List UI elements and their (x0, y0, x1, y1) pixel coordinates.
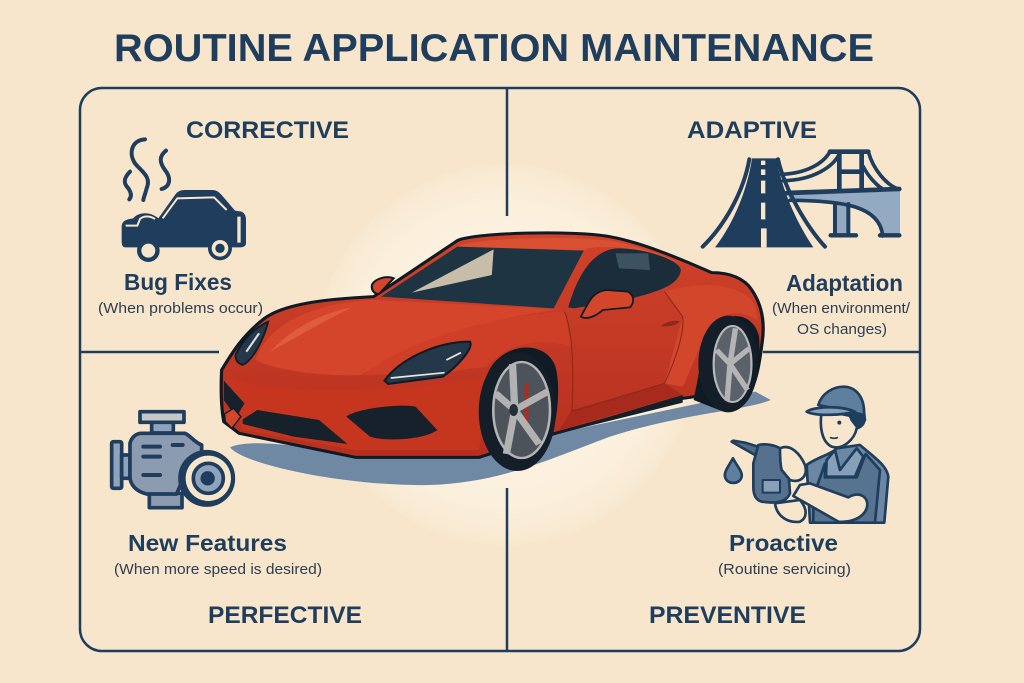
windshield (381, 247, 584, 308)
air intake (346, 406, 437, 439)
icon: smoking car (122, 139, 246, 262)
roof highlight (457, 238, 683, 265)
illustration: red sports car (221, 233, 771, 485)
rear fender highlight (665, 285, 757, 387)
side window (568, 248, 681, 308)
right headlight (385, 342, 471, 384)
label: proactive: Proactive (729, 530, 838, 556)
door handle (661, 321, 680, 326)
front wheel (479, 348, 558, 471)
panel: corrective (98, 117, 349, 317)
panel: adaptive (687, 117, 911, 338)
window reflection (615, 253, 650, 270)
fog lamp (225, 408, 241, 428)
label: new features: New Features (128, 530, 287, 556)
icon: engine (112, 412, 233, 508)
panel: preventive (649, 387, 888, 629)
note line 2: OS changes) (797, 322, 887, 338)
hood crease (270, 307, 352, 352)
note: when more speed is desired: (When more speed is desired) (114, 562, 322, 578)
front fender (363, 312, 572, 375)
headlight strip (391, 353, 461, 378)
car body (221, 233, 763, 457)
quadrant frame (80, 88, 920, 651)
note: when environment or OS changes: (When environment/ (772, 301, 911, 317)
sill (554, 395, 683, 433)
center glow (315, 165, 695, 545)
heading: perfective: PERFECTIVE (208, 602, 362, 629)
icon: mechanic with oil can (725, 387, 888, 523)
note: routine servicing: (Routine servicing) (718, 562, 851, 578)
label: adaptation: Adaptation (786, 270, 903, 296)
hood (255, 300, 559, 375)
left headlight (235, 322, 268, 365)
left mirror (372, 277, 394, 294)
rear wheel (694, 316, 759, 412)
label: bug fixes: Bug Fixes (124, 269, 232, 295)
front bumper (226, 377, 488, 450)
door lower shade (559, 383, 683, 430)
heading: adaptive: ADAPTIVE (687, 117, 817, 144)
door seam (565, 292, 683, 412)
side vent (224, 381, 245, 417)
right mirror (581, 290, 633, 318)
windshield reflection (412, 249, 494, 293)
heading: preventive: PREVENTIVE (649, 602, 806, 629)
title: ROUTINE APPLICATION MAINTENANCE (114, 27, 874, 70)
note: when problems occur: (When problems occur) (98, 301, 263, 317)
headlight glint (246, 333, 259, 352)
grille (243, 410, 347, 444)
icon: road and bridge (703, 152, 900, 247)
car shadow (230, 392, 771, 485)
heading: corrective: CORRECTIVE (186, 117, 349, 144)
panel: perfective (112, 412, 362, 629)
